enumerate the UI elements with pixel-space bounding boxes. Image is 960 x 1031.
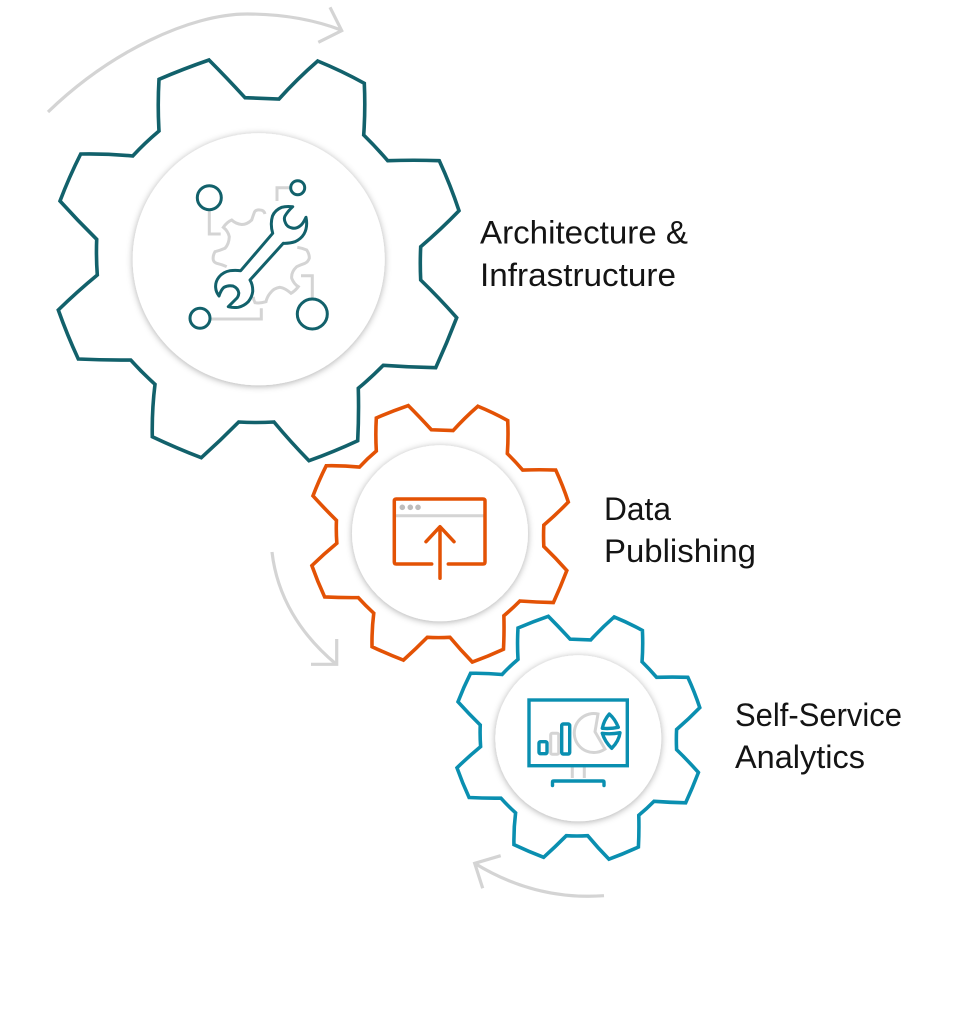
label: Data Publishing: Publishing <box>604 533 756 569</box>
label: Architecture & Infrastructure: Infrastructure <box>480 257 676 293</box>
label: Architecture & Infrastructure <box>480 214 688 293</box>
arrow: bottom <box>475 856 604 896</box>
hub circle <box>133 133 385 385</box>
label: Architecture & Infrastructure: Architecture & <box>480 214 688 250</box>
label: Self-Service Analytics: Self-Service <box>735 697 902 733</box>
label: Data Publishing: Data <box>604 491 671 527</box>
label: Self-Service Analytics <box>735 697 902 775</box>
label: Self-Service Analytics: Analytics <box>735 739 865 775</box>
icon: monitor with bars and pie chart <box>529 700 627 786</box>
arrow: middle <box>272 552 337 664</box>
gear: self-service analytics <box>457 616 700 859</box>
gear: data publishing <box>312 406 568 662</box>
hub circle <box>352 445 528 621</box>
arrow: top clockwise <box>48 7 342 112</box>
label: Data Publishing <box>604 491 756 569</box>
gear outline: teal <box>58 60 459 461</box>
gear outline: orange <box>312 406 568 662</box>
icon: wrench with gear and nodes <box>190 181 327 329</box>
icon: browser window with upload arrow <box>394 499 485 578</box>
gear: architecture and infrastructure <box>58 60 459 461</box>
hub circle <box>495 655 661 821</box>
gear outline: blue <box>457 616 700 859</box>
